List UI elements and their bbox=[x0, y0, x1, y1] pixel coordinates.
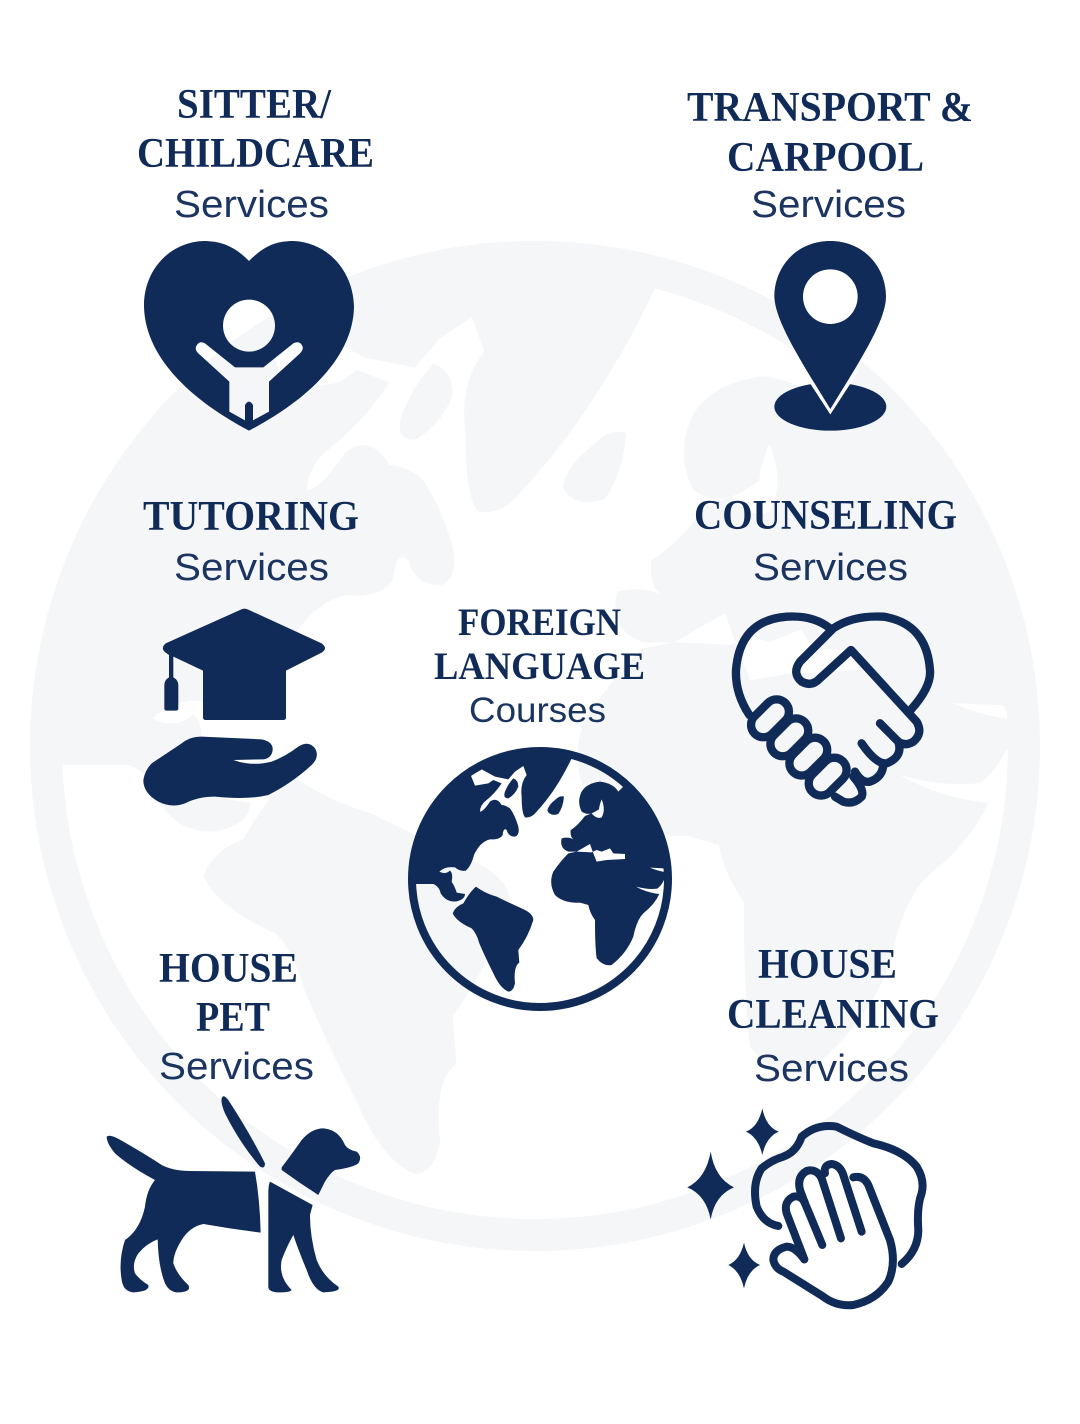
icon: hand wiping with sparkles bbox=[687, 1108, 923, 1305]
heading: sitter childcare: CHILDCARE bbox=[137, 131, 374, 177]
heading: house cleaning: Services bbox=[754, 1048, 909, 1090]
heading: house cleaning: HOUSE bbox=[758, 942, 897, 988]
heading: transport carpool: TRANSPORT & bbox=[687, 85, 973, 131]
heading: sitter childcare: Services bbox=[174, 184, 329, 226]
service: house cleaning bbox=[687, 942, 939, 1305]
heading: transport carpool: Services bbox=[751, 184, 906, 226]
heading: house cleaning bbox=[727, 942, 939, 1090]
icon: guide dog bbox=[107, 1096, 360, 1292]
icon: graduation cap on hand bbox=[143, 609, 325, 805]
heading: counseling: COUNSELING bbox=[694, 493, 957, 539]
icon: heart with child bbox=[144, 241, 354, 431]
heading: foreign language bbox=[434, 601, 645, 730]
heading: transport carpool bbox=[687, 85, 973, 226]
icon: handshake heart bbox=[736, 616, 930, 803]
heading: tutoring: Services bbox=[174, 547, 329, 589]
heading: tutoring: TUTORING bbox=[143, 494, 359, 540]
service: foreign language bbox=[400, 601, 677, 1007]
background globe bbox=[3, 231, 1054, 1235]
heading: house pet bbox=[159, 946, 314, 1088]
heading: counseling bbox=[694, 493, 957, 589]
heading: tutoring bbox=[143, 494, 359, 589]
icon: map pin bbox=[774, 241, 886, 431]
service: sitter and childcare bbox=[137, 82, 374, 431]
heading: foreign language: Courses bbox=[469, 691, 606, 730]
heading: house pet: HOUSE bbox=[159, 946, 298, 992]
icon: globe bbox=[400, 743, 677, 1007]
heading: foreign language: LANGUAGE bbox=[434, 645, 645, 688]
heading: foreign language: FOREIGN bbox=[458, 601, 621, 644]
heading: transport carpool: CARPOOL bbox=[727, 135, 924, 181]
service: house pet bbox=[107, 946, 360, 1292]
service: tutoring bbox=[143, 494, 359, 805]
heading: sitter childcare bbox=[137, 82, 374, 226]
heading: house cleaning: CLEANING bbox=[727, 992, 939, 1038]
heading: house pet: Services bbox=[159, 1046, 314, 1088]
heading: house pet: PET bbox=[196, 995, 270, 1041]
heading: counseling: Services bbox=[753, 547, 908, 589]
service: counseling bbox=[694, 493, 957, 803]
heading: sitter childcare: SITTER/ bbox=[177, 82, 332, 128]
service: transport and carpool bbox=[687, 85, 973, 431]
